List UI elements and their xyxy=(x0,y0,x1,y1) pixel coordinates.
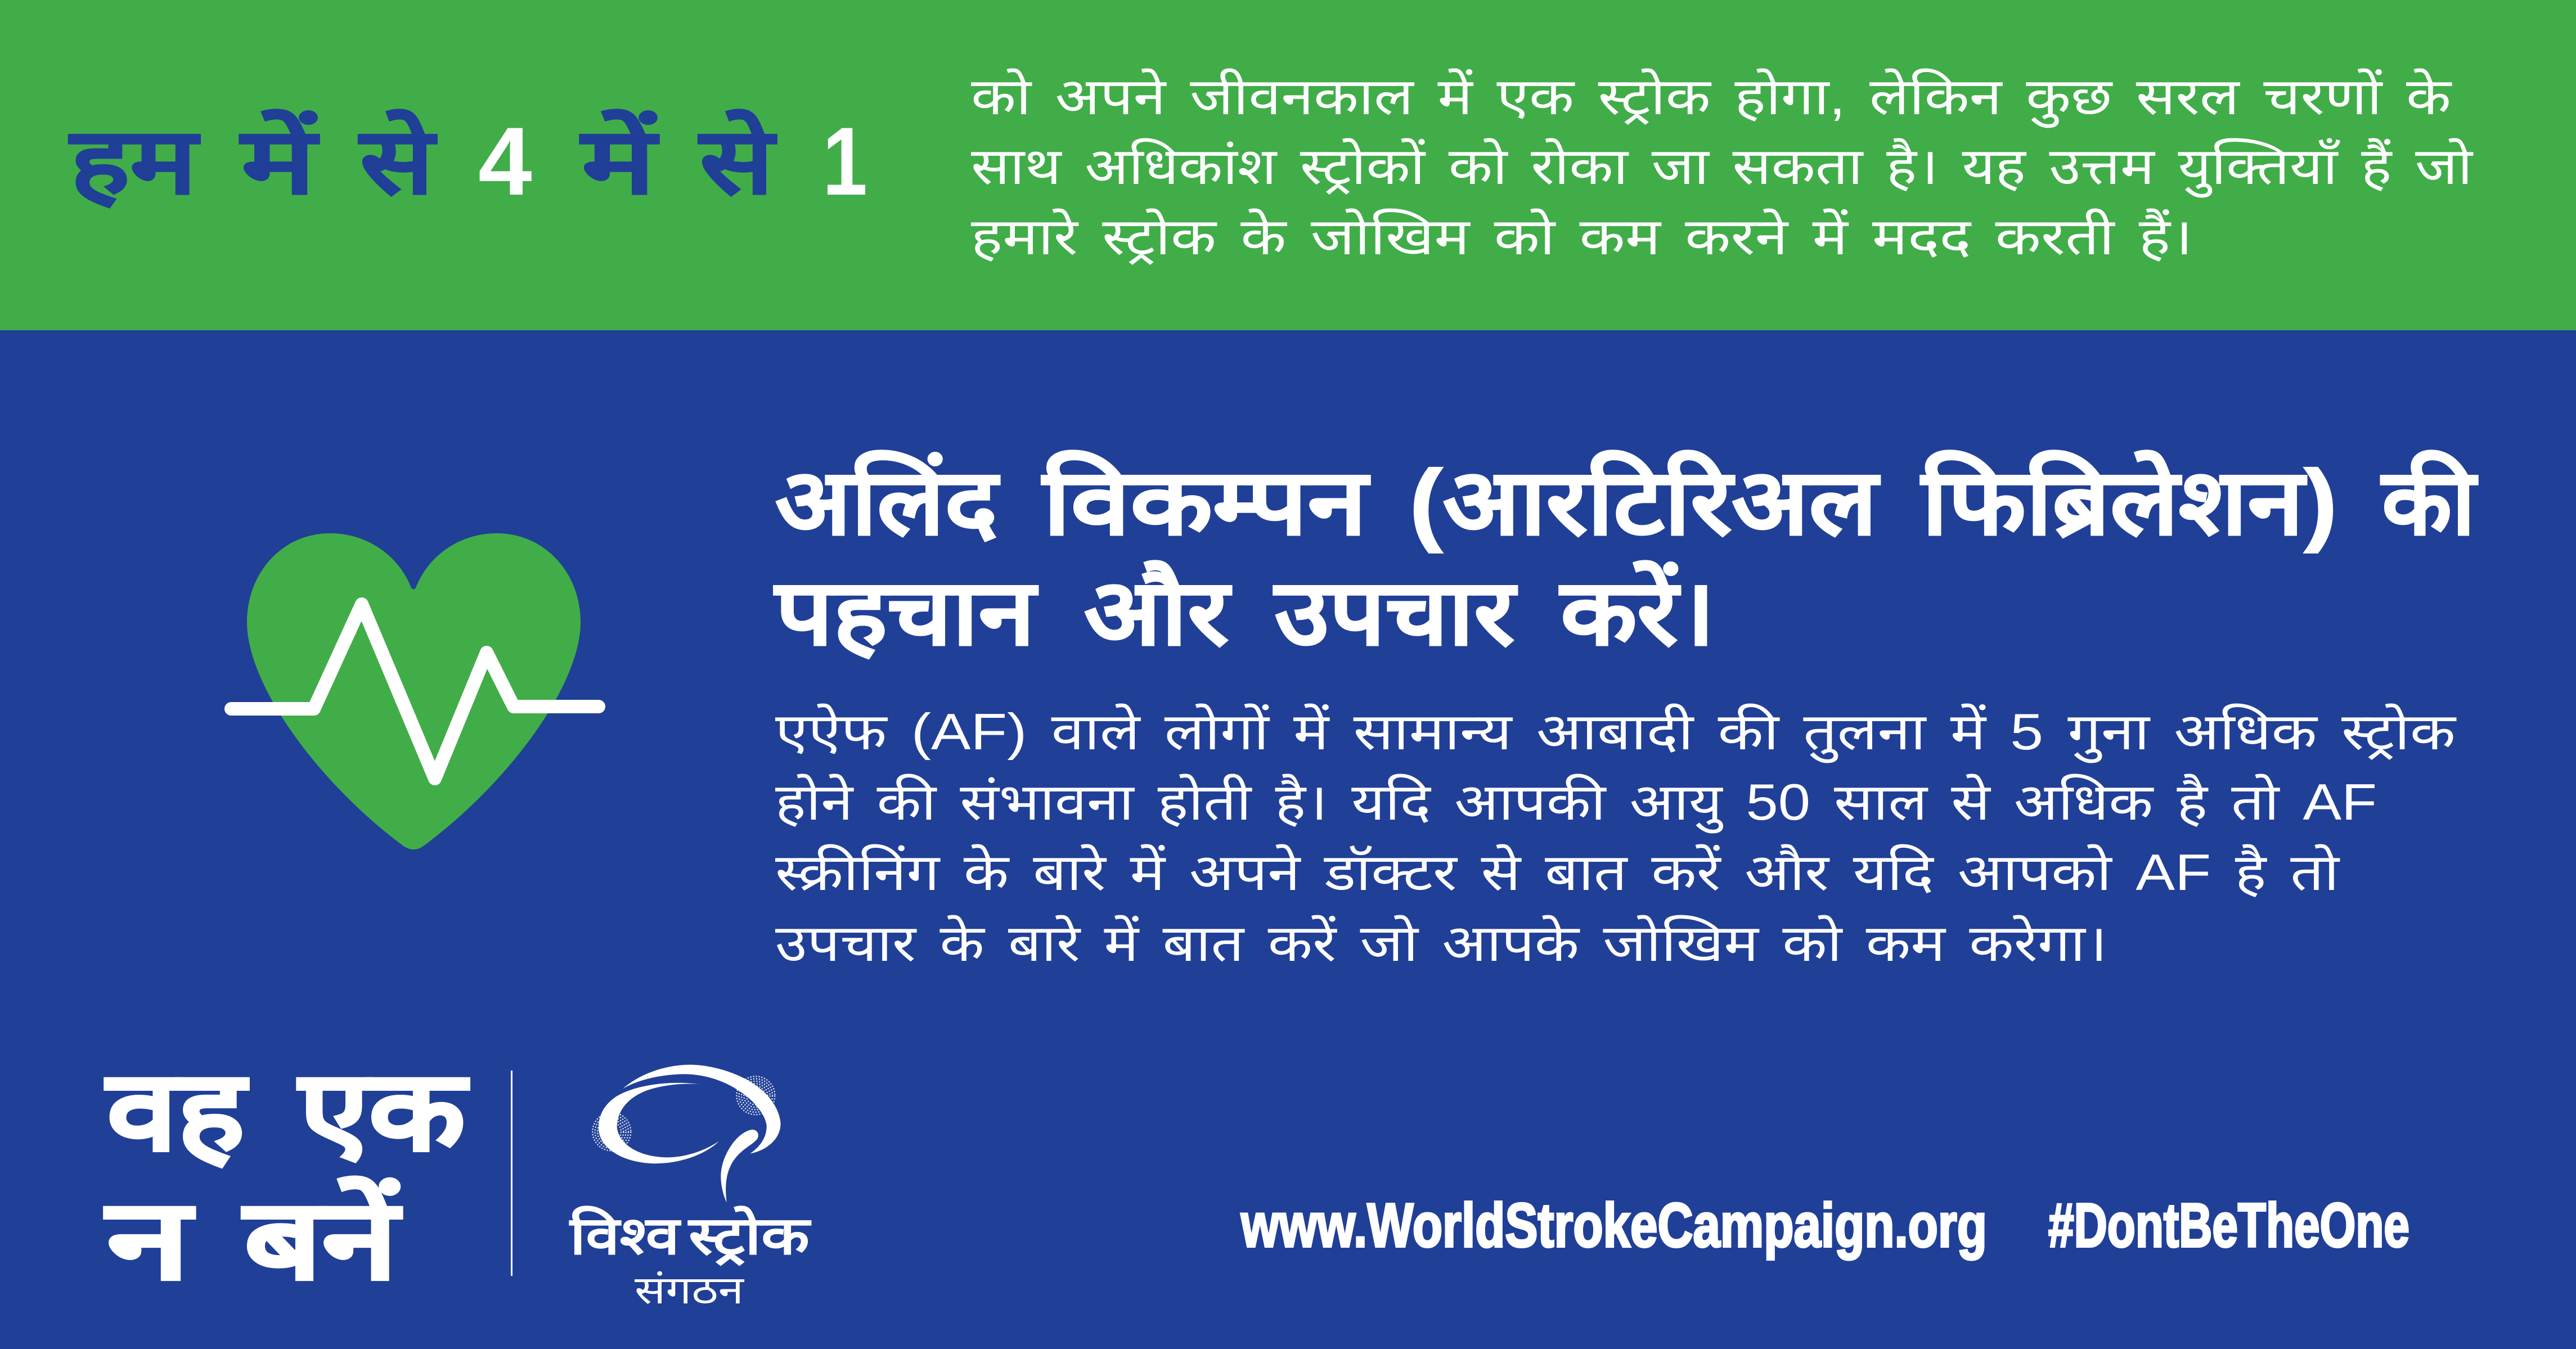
main heading: अलिंद xyxy=(775,450,1000,554)
body paragraph: स्क्रीनिंग के बारे में अपने डॉक्टर से बात करें और यदि आपको AF है तो xyxy=(775,844,2340,901)
icon: head swoosh emblem xyxy=(592,1065,781,1202)
main heading: उपचार xyxy=(1273,561,1518,664)
body paragraph: एऐफ (AF) वाले लोगों में सामान्य आबादी की तुलना में 5 गुना अधिक स्ट्रोक xyxy=(775,703,2457,763)
main heading: और xyxy=(1084,560,1232,664)
intro paragraph: हमारे स्ट्रोक के जोखिम को कम करने में मदद करती हैं। xyxy=(971,208,2193,266)
stat heading: 1 in 4 of us: 1 xyxy=(822,107,867,215)
intro paragraph xyxy=(971,68,2474,266)
slogan: don't be the one: न xyxy=(104,1177,195,1302)
main heading xyxy=(774,450,2479,664)
main heading: विकम्पन xyxy=(1041,450,1370,554)
slogan: don't be the one xyxy=(104,1049,470,1302)
slogan: don't be the one: बनें xyxy=(241,1176,402,1302)
body paragraph xyxy=(775,703,2457,972)
stat heading: 1 in 4 of us: से xyxy=(698,109,777,213)
slogan: don't be the one: एक xyxy=(296,1049,470,1173)
top green band xyxy=(0,0,2576,330)
slogan: don't be the one: वह xyxy=(104,1049,249,1173)
website url: www.WorldStrokeCampaign.org xyxy=(1240,1191,1987,1260)
main heading: फिब्रिलेशन) xyxy=(1920,450,2337,554)
stat heading: 1 in 4 of us: में xyxy=(239,109,320,213)
icon: heart with pulse line xyxy=(231,533,599,849)
body paragraph: होने की संभावना होती है। यदि आपकी आयु 50 साल से अधिक है तो AF xyxy=(775,774,2377,834)
intro paragraph: साथ अधिकांश स्ट्रोकों को रोका जा सकता है। यह उत्तम युक्तियाँ हैं जो xyxy=(971,138,2474,198)
website and hashtag xyxy=(1240,1191,2409,1260)
divider xyxy=(511,1071,512,1276)
stat heading: 1 in 4 of us xyxy=(68,107,867,215)
logo text: world stroke: विश्व xyxy=(569,1206,682,1265)
stat heading: 1 in 4 of us: से xyxy=(358,109,438,213)
stat heading: 1 in 4 of us: में xyxy=(579,109,659,213)
stat heading: 1 in 4 of us: 4 xyxy=(478,107,532,215)
main heading: की xyxy=(2380,450,2479,554)
stat heading: 1 in 4 of us: हम xyxy=(68,110,201,213)
logo text: world stroke xyxy=(569,1206,812,1266)
body paragraph: उपचार के बारे में बात करें जो आपके जोखिम को कम करेगा। xyxy=(775,915,2107,972)
hashtag: #DontBeTheOne xyxy=(2048,1191,2409,1260)
main heading: पहचान xyxy=(774,561,1039,664)
logo: world stroke organization xyxy=(569,1065,812,1312)
main heading: करें। xyxy=(1559,560,1715,664)
logo text: organization: संगठन xyxy=(635,1269,745,1312)
main heading: (आरटिरिअल xyxy=(1409,450,1881,554)
logo text: world stroke: स्ट्रोक xyxy=(687,1206,812,1266)
intro paragraph: को अपने जीवनकाल में एक स्ट्रोक होगा, लेकिन कुछ सरल चरणों के xyxy=(971,68,2452,128)
